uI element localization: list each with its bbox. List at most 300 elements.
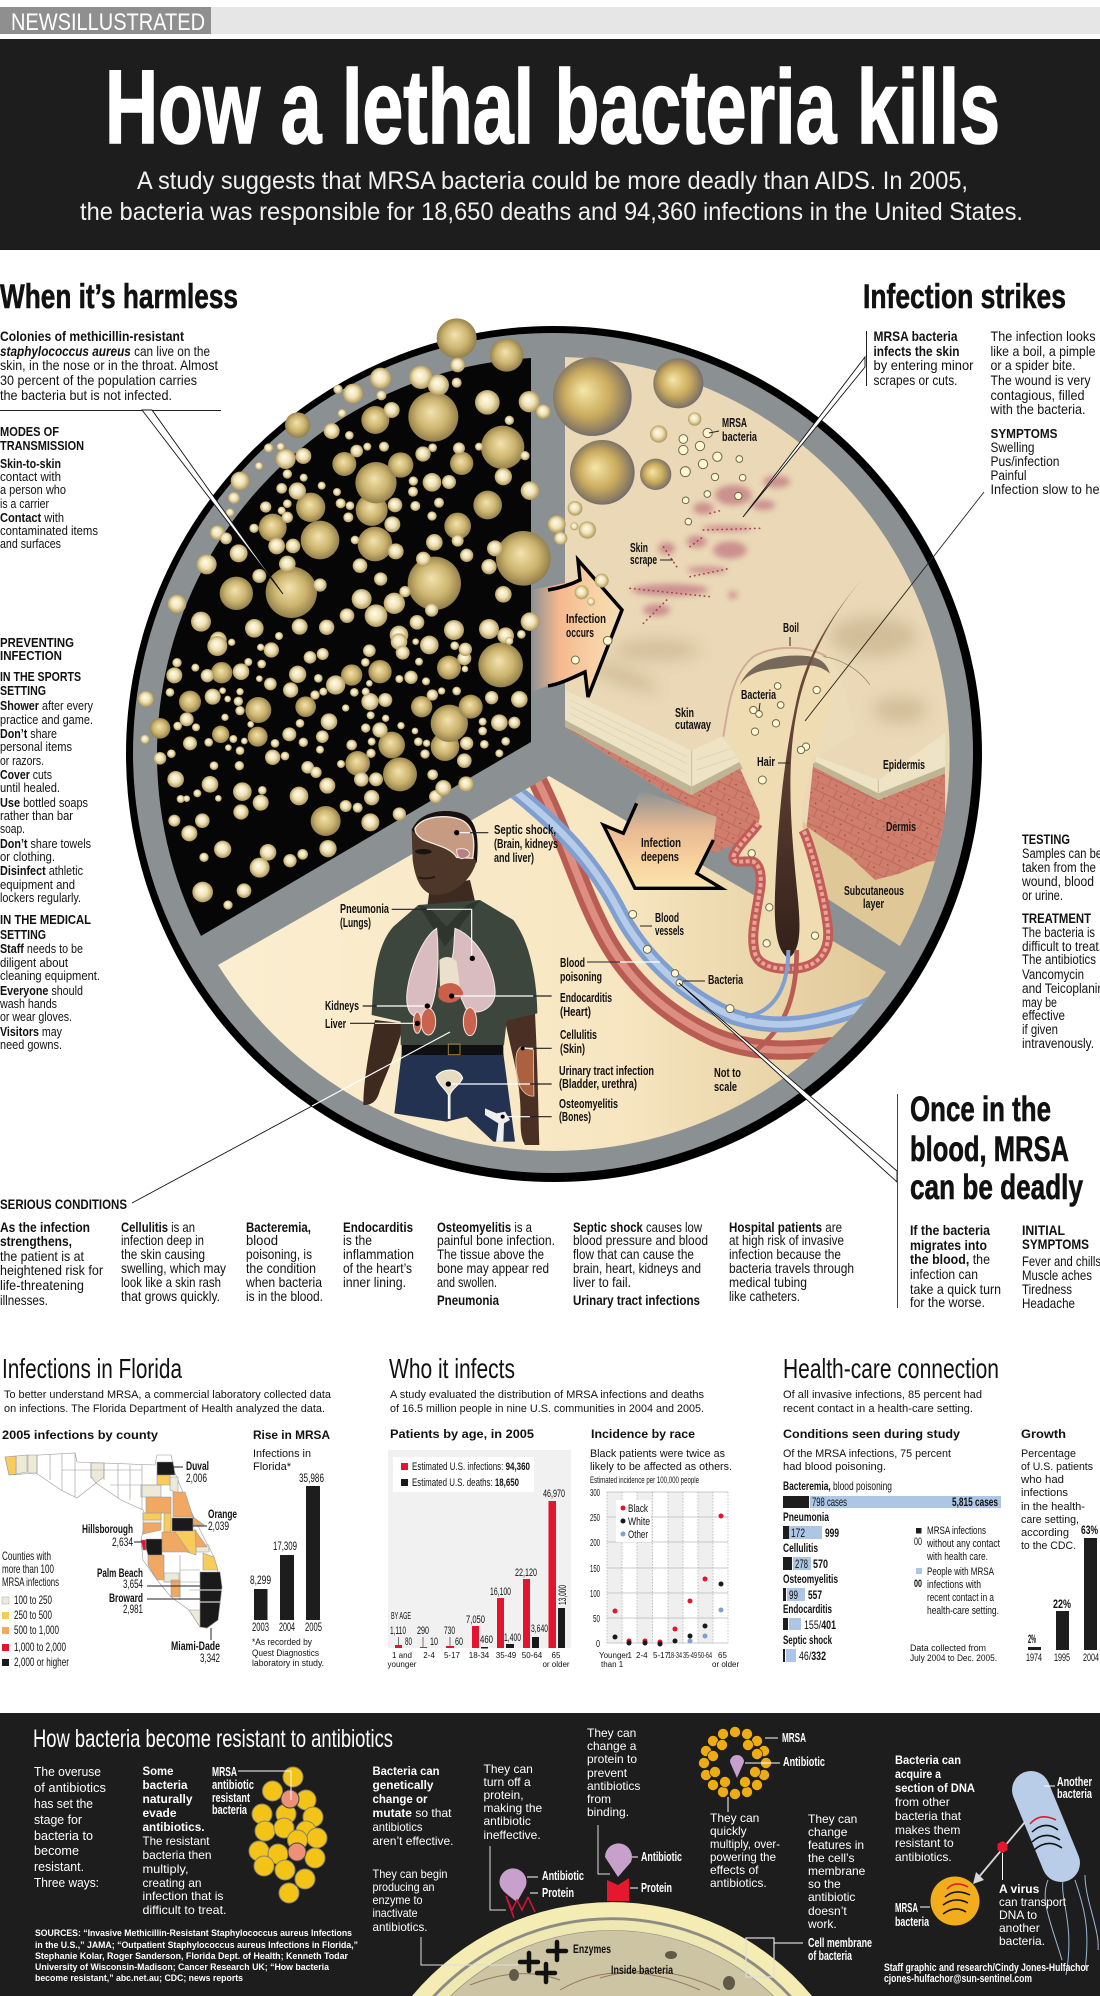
text block: serious conditions: swelling, which may — [121, 1260, 226, 1276]
illustration labels: (Heart) — [560, 1004, 591, 1019]
text block: harmless intro: 30 percent of the population carries — [0, 372, 197, 388]
text block: serious conditions: and swollen. — [437, 1274, 497, 1290]
hair — [775, 578, 863, 958]
text block: harmless intro: skin, in the nose or in the throat. Almost — [0, 357, 218, 373]
chart legend: 00 — [914, 1536, 922, 1548]
subheads: Rise in MRSA — [253, 1428, 330, 1442]
heading: Infections in Florida — [2, 1353, 182, 1384]
text block: serious conditions: bone may appear red — [437, 1260, 549, 1276]
callout: cell membrane box: Cell membrane — [808, 1936, 872, 1950]
illustration: MRSA cluster: MRSA — [212, 1765, 237, 1779]
text block: preventing infection: diligent about — [0, 955, 68, 970]
text: a virus — [999, 1882, 1067, 1948]
subtitle — [80, 167, 1023, 226]
text: quickly multiply: antibiotics. — [710, 1876, 767, 1890]
text block: testing and treatment: or urine. — [1022, 888, 1063, 903]
text block: preventing infection: wash hands — [0, 996, 57, 1011]
intro: on infections. The Florida Department of Health analyzed the data. — [4, 1403, 325, 1415]
text block: preventing infection: cleaning equipment. — [0, 968, 100, 983]
illustration labels: Infection — [566, 611, 606, 626]
bar chart: conditions: 999 — [825, 1526, 839, 1540]
text: change membrane: work. — [807, 1917, 837, 1931]
subheads: Growth — [1021, 1427, 1066, 1441]
sources: University of Wisconsin-Madison; Cancer Research UK; “How bacteria — [35, 1962, 330, 1973]
subheads: Incidence by race — [591, 1427, 695, 1441]
text block: serious conditions: illnesses. — [0, 1292, 48, 1308]
illustration: MRSA cluster: antibiotic — [212, 1778, 254, 1792]
text: a virus: DNA to — [999, 1908, 1037, 1922]
bar chart: growth: to the CDC. — [1021, 1540, 1076, 1552]
text block: serious conditions: is in the blood. — [246, 1288, 323, 1304]
map labels: 2,039 — [208, 1519, 229, 1533]
text block: infection looks — [990, 328, 1100, 497]
bar chart: patients by age: 60 — [455, 1636, 463, 1648]
map labels: 2,634 — [112, 1535, 133, 1549]
scatter chart: incidence by race: 50-64 — [698, 1651, 712, 1660]
text block: modes of transmission: TRANSMISSION — [0, 438, 84, 453]
scatter chart: incidence by race: 2-4 — [636, 1651, 648, 1660]
text: genetically mutate: inactivate — [372, 1906, 418, 1920]
text: three ways: become — [34, 1843, 79, 1858]
panel: blood and body sector — [218, 776, 886, 1151]
text block: serious conditions: like catheters. — [729, 1288, 800, 1304]
scatter chart: incidence by race: 250 — [590, 1513, 600, 1524]
map labels: 3,654 — [123, 1577, 143, 1591]
text block: harmless intro: the bacteria but is not infected. — [0, 387, 172, 403]
illustration labels: vessels — [655, 923, 684, 938]
text block: serious conditions: painful bone infection. — [437, 1232, 555, 1248]
callout: once in the blood: Once in the — [910, 1090, 1051, 1129]
text block: serious conditions: poisoning, is — [246, 1246, 312, 1262]
icon: antibiotic on protein one: Antibiotic — [542, 1869, 584, 1883]
map legend: 500 to 1,000 — [14, 1623, 59, 1637]
text block: serious conditions: Septic shock causes low — [573, 1219, 703, 1235]
scatter chart: incidence by race: Other — [628, 1529, 648, 1541]
bar chart: rise in MRSA: *As recorded by — [252, 1637, 312, 1647]
illustration labels: (Bladder, urethra) — [559, 1076, 637, 1091]
text: genetically mutate: Bacteria can — [372, 1764, 440, 1778]
text block: infects the skin: infects the skin — [874, 343, 960, 359]
text block: infection looks: SYMPTOMS — [990, 426, 1058, 441]
intro: A study evaluated the distribution of MRSA infections and deaths — [390, 1389, 704, 1401]
bar chart: conditions: 278 — [795, 1557, 808, 1571]
map of Florida — [5, 1453, 222, 1640]
text block: preventing infection: or wear gloves. — [0, 1009, 72, 1024]
text: change membrane: features in — [808, 1838, 864, 1852]
intro: of 16.5 million people in nine U.S. communities in 2004 and 2005. — [390, 1403, 704, 1415]
text block: serious conditions: blood — [246, 1232, 278, 1248]
text block: preventing infection: Everyone should — [0, 983, 83, 998]
illustration labels: Septic shock, — [494, 822, 556, 837]
map legend: Counties with — [2, 1549, 51, 1563]
bar chart: patients by age: 7,050 — [466, 1614, 485, 1626]
text block: preventing infection: soap. — [0, 821, 25, 836]
text: quickly multiply — [710, 1811, 780, 1890]
text: genetically mutate: They can begin — [372, 1867, 448, 1881]
right arm — [505, 1013, 539, 1145]
text: change membrane — [807, 1812, 866, 1931]
bar chart: patients by age — [388, 1450, 571, 1669]
intro — [783, 1389, 982, 1415]
text: acquire DNA: from other — [895, 1795, 950, 1809]
map labels: 2,981 — [123, 1602, 143, 1616]
text: genetically mutate: change or — [372, 1792, 428, 1806]
map labels: Miami-Dade — [171, 1639, 220, 1653]
text: a virus: can transport — [999, 1895, 1067, 1909]
text block: serious conditions: life-threatening — [0, 1277, 84, 1293]
bar chart: patients by age: 460 — [480, 1634, 493, 1646]
text block: serious conditions: when bacteria — [245, 1274, 322, 1290]
text block: harmless intro: staphylococcus aureus can live on the — [0, 343, 210, 359]
scatter chart: incidence by race: 150 — [590, 1564, 600, 1575]
text: three ways: has set the — [34, 1796, 93, 1811]
subtitle: A study suggests that MRSA bacteria could be more deadly than AIDS. In 2005, — [137, 167, 968, 195]
text block: preventing infection: lockers regularly. — [0, 890, 81, 905]
chart legend: 00 — [914, 1578, 922, 1590]
illustration labels: Subcutaneous — [844, 883, 904, 898]
icon: antibiotic on protein one — [499, 1868, 584, 1918]
illustration labels: MRSA — [722, 415, 747, 430]
text: acquire DNA — [895, 1753, 975, 1864]
illustration labels: scale — [714, 1079, 737, 1094]
text block: serious conditions: SERIOUS CONDITIONS — [0, 1196, 127, 1212]
brain — [415, 817, 474, 858]
illustration labels: Blood — [655, 910, 679, 925]
bar chart: patients by age: 290 — [417, 1625, 429, 1637]
text block: modes of transmission: Skin-to-skin — [0, 456, 61, 471]
text block: preventing infection: personal items — [0, 739, 72, 754]
bar chart: patients by age: 65 — [552, 1651, 561, 1660]
scatter chart: incidence by race: 1 — [628, 1651, 632, 1660]
text block: serious conditions: infection deep in — [121, 1232, 204, 1248]
text: change a protein — [587, 1726, 640, 1819]
skin bump — [722, 646, 857, 760]
illustration: cell dome — [412, 1902, 812, 1996]
text block: preventing infection: Visitors may — [0, 1024, 62, 1039]
text: three ways — [34, 1764, 106, 1890]
sources — [35, 1928, 358, 1984]
chart legend — [910, 1525, 1000, 1663]
scatter chart: incidence by race: 100 — [590, 1589, 600, 1600]
text block: serious conditions: inflammation — [343, 1246, 414, 1262]
heart — [439, 957, 460, 988]
text block: preventing infection: SETTING — [0, 683, 46, 698]
dome labels — [573, 1942, 673, 1977]
text: genetically mutate: producing an — [372, 1880, 434, 1894]
intro: incidence by race: Black patients were twice as — [590, 1448, 725, 1460]
text: quickly multiply: effects of — [710, 1863, 759, 1877]
small bacteria, lower half — [138, 633, 528, 910]
text block: infects the skin: MRSA bacteria — [874, 328, 958, 344]
bar chart: rise in MRSA: 8,299 — [250, 1573, 271, 1587]
illustration labels: Liver — [325, 1016, 346, 1031]
illustration: MRSA cluster — [212, 1765, 327, 1903]
illustration labels: Epidermis — [883, 757, 925, 772]
callout: once in the blood: the blood, the — [910, 1251, 990, 1267]
text block: preventing infection: rather than bar — [0, 808, 74, 823]
scatter chart: incidence by race: 300 — [590, 1488, 600, 1499]
text: naturally evade: evade — [142, 1806, 177, 1820]
text block: infection looks: or a spider bite. — [990, 357, 1076, 373]
text block: preventing infection: Staff needs to be — [0, 941, 83, 956]
subheads: Patients by age, in 2005 — [390, 1427, 534, 1441]
epidermis left — [565, 690, 743, 795]
illustration labels: Infection — [641, 835, 681, 850]
text block: modes of transmission: contaminated items — [0, 523, 98, 538]
bar chart: patients by age: 13,000 — [557, 1585, 569, 1605]
text block: serious conditions: flow that can cause the — [573, 1246, 694, 1262]
belt — [402, 1045, 503, 1055]
subheads — [2, 1428, 330, 1442]
bar chart: patients by age: 16,100 — [490, 1586, 511, 1598]
bar chart: patients by age: 2-4 — [423, 1651, 435, 1660]
scatter chart: incidence by race: or older — [712, 1660, 739, 1669]
bar chart: patients by age: 50-64 — [522, 1651, 543, 1660]
bar chart: conditions: 5,815 cases — [952, 1495, 998, 1509]
title banner — [0, 39, 1100, 250]
text block: harmless intro: Colonies of methicillin-resistant — [0, 328, 184, 344]
bar chart: patients by age: 10 — [430, 1636, 438, 1648]
chart legend: People with MRSA — [927, 1566, 994, 1578]
illustration labels: (Bones) — [559, 1109, 591, 1124]
large MRSA spheres on skin — [536, 357, 746, 606]
neck — [427, 880, 477, 912]
small bacteria, upper half — [168, 358, 551, 648]
bar chart: conditions: Endocarditis — [783, 1602, 832, 1616]
callout: cell membrane box — [746, 1936, 872, 1977]
text: quickly multiply: They can — [710, 1811, 759, 1825]
icon: antibiotic blocked by protein — [605, 1843, 682, 1901]
bar chart: patients by age: 5-17 — [444, 1651, 461, 1660]
intro — [4, 1389, 332, 1415]
map labels: 3,342 — [200, 1651, 220, 1665]
map legend: more than 100 — [2, 1562, 54, 1576]
scatter chart: incidence by race: 18-34 — [668, 1651, 682, 1660]
bar chart: rise in MRSA: 2005 — [305, 1620, 322, 1634]
text: change a protein: protein to — [587, 1752, 637, 1766]
illustration: another bacteria capsule — [1030, 1775, 1098, 1975]
illustration: blood vessels — [497, 760, 873, 1050]
illustration labels: (Brain, kidneys — [494, 836, 558, 851]
illustration labels: (Skin) — [560, 1041, 585, 1056]
epidermis right — [813, 733, 945, 800]
callout: cell membrane box: of bacteria — [808, 1949, 853, 1963]
map legend: 2,000 or higher — [14, 1655, 69, 1669]
illustration: MRSA ring with antibiotic — [698, 1726, 825, 1812]
text: naturally evade: The resistant — [142, 1834, 210, 1848]
text block: modes of transmission: MODES OF — [0, 424, 59, 439]
intro: To better understand MRSA, a commercial laboratory collected data — [4, 1389, 332, 1401]
dermis right — [807, 763, 945, 880]
bar chart: patients by age: Estimated U.S. deaths: 18,650 — [412, 1477, 519, 1489]
text block: serious conditions: infection because the — [729, 1246, 841, 1262]
illustration labels: Bacteria — [741, 687, 777, 702]
callout: once in the blood: Tiredness — [1022, 1281, 1072, 1297]
text: change membrane: antibiotic — [808, 1890, 855, 1904]
illustration labels: Cellulitis — [560, 1027, 597, 1042]
text: turn off a protein: making the — [484, 1801, 543, 1815]
panel: skin infection sector — [560, 350, 960, 993]
text: turn off a protein: They can — [484, 1762, 533, 1776]
intro — [390, 1389, 704, 1415]
text block: serious conditions: brain, heart, kidneys and — [573, 1260, 701, 1276]
text: change a protein: binding. — [587, 1805, 629, 1819]
scatter chart: incidence by race: than 1 — [601, 1660, 624, 1669]
illustration labels: and liver) — [494, 850, 534, 865]
chart legend: recent contact in a — [927, 1592, 995, 1604]
bar chart: growth: of U.S. patients — [1021, 1461, 1093, 1473]
illustration: hair follicle and boil — [692, 578, 870, 969]
intro: conditions: had blood poisoning. — [783, 1461, 886, 1473]
arrow: infection deepens — [603, 790, 722, 888]
map labels: Broward — [109, 1591, 143, 1605]
intro: incidence by race: Estimated incidence per 100,000 people — [590, 1475, 699, 1485]
text: turn off a protein: turn off a — [484, 1775, 531, 1789]
illustration labels: poisoning — [560, 969, 602, 984]
text: naturally evade: multiply, — [142, 1862, 188, 1876]
dermis beside follicle — [692, 768, 763, 853]
bar chart: patients by age: 18-34 — [469, 1651, 490, 1660]
text: change membrane: membrane — [808, 1864, 866, 1878]
text block: serious conditions: The tissue above the — [437, 1246, 544, 1262]
text block: preventing infection: Use bottled soaps — [0, 795, 88, 810]
text block: preventing infection: PREVENTING — [0, 635, 74, 650]
illustration labels: layer — [863, 896, 884, 911]
header strip — [0, 7, 1100, 36]
text: turn off a protein: ineffective. — [484, 1828, 541, 1842]
panel: infections in Florida — [2, 1353, 332, 1669]
text: quickly multiply: quickly — [710, 1824, 747, 1838]
text block: serious conditions: blood pressure and blood — [573, 1232, 708, 1248]
bar chart: patients by age: BY AGE — [391, 1611, 411, 1622]
callout: once in the blood: Headache — [1022, 1295, 1075, 1311]
text block: serious conditions: Hospital patients are — [729, 1219, 842, 1235]
panel: harmless bacteria black sector — [157, 358, 531, 936]
illustration labels: bacteria — [722, 429, 758, 444]
bar chart: patients by age: 46,970 — [543, 1488, 565, 1500]
illustration labels: Pneumonia — [340, 901, 390, 916]
arrow: infection occurs — [531, 560, 622, 697]
intro: Of all invasive infections, 85 percent had — [783, 1389, 982, 1401]
text block: infection looks: Pus/infection — [990, 454, 1060, 469]
text block: testing and treatment: wound, blood — [1021, 874, 1094, 889]
text block: serious conditions: medical tubing — [729, 1274, 807, 1290]
bar chart: rise in MRSA: 17,309 — [273, 1539, 297, 1553]
bar chart: rise in MRSA: Florida* — [253, 1461, 292, 1473]
illustration labels: Osteomyelitis — [559, 1096, 618, 1111]
dome labels: Enzymes — [573, 1942, 611, 1956]
bar chart: conditions: Bacteremia, blood poisoning — [783, 1479, 892, 1493]
text block: modes of transmission: is a carrier — [0, 496, 50, 511]
heading: Who it infects — [389, 1353, 515, 1384]
bar chart: growth: Percentage — [1021, 1448, 1076, 1460]
bar chart: conditions: 570 — [813, 1557, 828, 1571]
bacteria in the black sector, upper half — [220, 318, 551, 618]
illustration labels: Not to — [714, 1065, 741, 1080]
bacteria in the black sector, lower half — [150, 643, 523, 836]
credit: cjones-hulfachor@sun-sentinel.com — [884, 1973, 1032, 1985]
text: three ways: stage for — [34, 1812, 83, 1827]
bar chart: patients by age: 1,400 — [504, 1632, 521, 1644]
lungs — [407, 928, 438, 1016]
text block: preventing infection: equipment and — [0, 877, 75, 892]
bladder — [436, 1070, 463, 1118]
bar chart: patients by age: 3,640 — [531, 1623, 548, 1635]
bar chart: conditions: Cellulitis — [783, 1541, 818, 1555]
text: naturally evade: difficult to treat. — [142, 1903, 226, 1917]
text block: preventing infection: Cover cuts — [0, 767, 52, 782]
bone — [485, 1108, 510, 1142]
skin scrape marks — [630, 476, 790, 623]
credit — [884, 1962, 1090, 1985]
bar chart: conditions: 798 cases — [812, 1495, 847, 1509]
text block: serious conditions: As the infection — [0, 1219, 90, 1235]
subheads: 2005 infections by county — [2, 1428, 158, 1442]
text: genetically mutate: mutate so that — [372, 1806, 452, 1820]
bar chart: conditions: Septic shock — [783, 1633, 832, 1647]
text block: infection looks: contagious, filled — [990, 387, 1084, 403]
map labels: Duval — [186, 1459, 209, 1473]
map labels: Hillsborough — [82, 1522, 133, 1536]
subtitle: the bacteria was responsible for 18,650 deaths and 94,360 infections in the United States. — [80, 198, 1023, 226]
text block: preventing infection: IN THE MEDICAL — [0, 912, 91, 927]
text: three ways: resistant. — [34, 1859, 84, 1874]
callout: once in the blood: for the worse. — [910, 1294, 985, 1310]
illustration labels: deepens — [641, 849, 679, 864]
text: change membrane: the cell’s — [808, 1851, 854, 1865]
text: acquire DNA: section of DNA — [895, 1781, 975, 1795]
callout: once in the blood: If the bacteria — [910, 1222, 990, 1238]
illustration labels — [325, 415, 925, 1124]
heading: when it's harmless: When it’s harmless — [0, 278, 238, 316]
text block: preventing infection: or razors. — [0, 753, 44, 768]
chart legend: without any contact — [926, 1538, 1000, 1550]
bar chart: conditions: 557 — [808, 1588, 822, 1602]
subcutaneous layer — [684, 804, 938, 946]
illustration labels: Skin — [675, 705, 694, 720]
text block: preventing infection: Shower after every — [0, 698, 93, 713]
text block: preventing infection: SETTING — [0, 927, 46, 942]
dermis left — [565, 726, 760, 812]
shirt — [372, 900, 537, 1045]
text: naturally evade: bacteria — [142, 1778, 188, 1792]
bar chart: growth: care setting, — [1021, 1514, 1079, 1526]
text block: modes of transmission: contact with — [0, 469, 61, 484]
bar chart: patients by age: 80 — [405, 1636, 412, 1648]
kidneys and liver — [421, 1008, 436, 1035]
illustration labels: Dermis — [886, 819, 916, 834]
map labels: Palm Beach — [97, 1566, 143, 1580]
illustration: MRSA cluster: bacteria — [212, 1803, 248, 1817]
jeans — [394, 1053, 515, 1142]
bar chart: conditions: Pneumonia — [783, 1510, 829, 1524]
text block: infects the skin — [866, 328, 974, 388]
scatter chart: incidence by race: White — [628, 1516, 650, 1528]
text block: preventing infection — [0, 635, 100, 1052]
text block: serious conditions: look like a skin rash — [121, 1274, 221, 1290]
map labels: Orange — [208, 1507, 237, 1521]
cellulitis patch — [516, 1047, 534, 1096]
bar chart: patients by age: 22,120 — [515, 1567, 537, 1579]
small bacteria in boil and vessels — [571, 636, 820, 1013]
icon: antibiotic blocked by protein: Antibiotic — [641, 1850, 682, 1864]
illustration labels: Urinary tract infection — [559, 1063, 654, 1078]
bar chart: growth: 1974 — [1026, 1652, 1042, 1664]
follicle membrane — [733, 823, 828, 969]
bar chart: patients by age: 35-49 — [496, 1651, 517, 1660]
text: naturally evade: antibiotics. — [142, 1820, 204, 1834]
intro: incidence by race — [590, 1448, 732, 1485]
